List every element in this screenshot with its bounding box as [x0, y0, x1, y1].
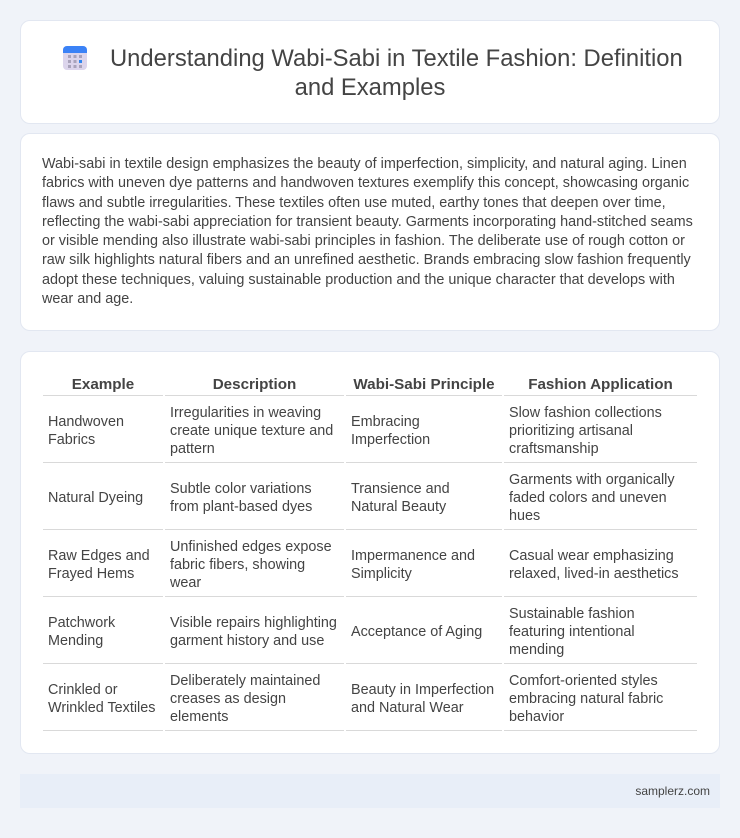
row: Patchwork Mending: garment history and use: [170, 633, 324, 649]
title: Understanding Wabi-Sabi in Textile Fashion: Definition: [110, 45, 683, 72]
row: Raw Edges and Frayed Hems: [48, 539, 679, 591]
row: Natural Dyeing: [48, 472, 675, 524]
row: Raw Edges and Frayed Hems: Frayed Hems: [48, 566, 134, 582]
row: Raw Edges and Frayed Hems: Simplicity: [351, 566, 412, 582]
row: Handwoven Fabrics: Handwoven: [48, 414, 124, 430]
row: Natural Dyeing: faded colors and uneven: [509, 490, 667, 506]
row: Natural Dyeing: Natural Beauty: [351, 499, 446, 515]
table header: Example: [72, 376, 134, 393]
row: Raw Edges and Frayed Hems: Impermanence and: [351, 548, 475, 564]
row: Crinkled or Wrinkled Textiles: Crinkled or: [48, 682, 118, 698]
row: Patchwork Mending: Sustainable fashion: [509, 606, 635, 622]
table header: Description: [213, 376, 296, 393]
paragraph text: Wabi-sabi in textile design emphasizes the beauty of imperfection, simplicity, and natural aging. Linen: [42, 156, 687, 172]
row: Handwoven Fabrics: Slow fashion collections: [509, 405, 662, 421]
row: Natural Dyeing: Subtle color variations: [170, 481, 312, 497]
row rules: [43, 395, 697, 731]
row: Crinkled or Wrinkled Textiles: [48, 673, 663, 725]
row: Handwoven Fabrics: Embracing: [351, 414, 420, 430]
title: and Examples: [295, 74, 445, 101]
row: Patchwork Mending: Patchwork: [48, 615, 115, 631]
row: Crinkled or Wrinkled Textiles: embracing natural fabric: [509, 691, 663, 707]
row: Natural Dyeing: from plant-based dyes: [170, 499, 312, 515]
paragraph text: adopt these techniques, valuing sustainable production and the unique character that develops with: [42, 272, 675, 288]
row: Raw Edges and Frayed Hems: Raw Edges and: [48, 548, 150, 564]
row: Handwoven Fabrics: Imperfection: [351, 432, 430, 448]
table header: Wabi-Sabi Principle: [353, 376, 495, 393]
row: Crinkled or Wrinkled Textiles: Comfort-oriented styles: [509, 673, 658, 689]
row: Raw Edges and Frayed Hems: Casual wear emphasizing: [509, 548, 674, 564]
row: Handwoven Fabrics: Fabrics: [48, 432, 95, 448]
row: Patchwork Mending: [48, 606, 635, 658]
paragraph text: fabrics with uneven dye patterns and handwoven textures exemplify this concept, showcasing organic: [42, 175, 689, 191]
header card: [20, 20, 720, 124]
row: Crinkled or Wrinkled Textiles: Wrinkled Textiles: [48, 700, 155, 716]
row: Handwoven Fabrics: [48, 405, 662, 457]
row: Patchwork Mending: Visible repairs highlighting: [170, 615, 337, 631]
paragraph text: reflecting the wabi-sabi appreciation for transient beauty. Garments incorporating hand-stitched seams: [42, 214, 693, 230]
row: Raw Edges and Frayed Hems: relaxed, lived-in aesthetics: [509, 566, 679, 582]
row: Crinkled or Wrinkled Textiles: elements: [170, 709, 228, 725]
row: Crinkled or Wrinkled Textiles: Deliberately maintained: [170, 673, 320, 689]
row: Raw Edges and Frayed Hems: fabric fibers, showing: [170, 557, 305, 573]
table header: [72, 376, 673, 393]
row: Patchwork Mending: mending: [509, 642, 564, 658]
row: Natural Dyeing: Natural Dyeing: [48, 490, 143, 506]
footer credit: samplerz.com: [635, 784, 710, 798]
title: [63, 45, 683, 101]
icon: calendar: [63, 46, 87, 70]
row: Patchwork Mending: Mending: [48, 633, 103, 649]
row: Natural Dyeing: Transience and: [351, 481, 450, 497]
row: Crinkled or Wrinkled Textiles: Beauty in Imperfection: [351, 682, 494, 698]
row: Crinkled or Wrinkled Textiles: and Natural Wear: [351, 700, 464, 716]
row: Raw Edges and Frayed Hems: wear: [170, 575, 201, 591]
row: Natural Dyeing: Garments with organically: [509, 472, 675, 488]
table card: [20, 351, 720, 754]
paragraph text: wear and age.: [42, 291, 133, 307]
row: Handwoven Fabrics: create unique texture and: [170, 423, 333, 439]
footer bar: [20, 774, 720, 808]
row: Natural Dyeing: hues: [509, 508, 540, 524]
table header: Fashion Application: [528, 376, 673, 393]
row: Crinkled or Wrinkled Textiles: creases as design: [170, 691, 286, 707]
row: Patchwork Mending: Acceptance of Aging: [351, 624, 482, 640]
row: Crinkled or Wrinkled Textiles: behavior: [509, 709, 564, 725]
row: Handwoven Fabrics: craftsmanship: [509, 441, 599, 457]
paragraph text: flaws and subtle irregularities. These textiles often use muted, earthy tones that deepen over time,: [42, 195, 666, 211]
paragraph text: [42, 156, 693, 307]
row: Patchwork Mending: featuring intentional: [509, 624, 635, 640]
row: Handwoven Fabrics: Irregularities in weaving: [170, 405, 321, 421]
row: Handwoven Fabrics: prioritizing artisanal: [509, 423, 633, 439]
paragraph text: raw silk highlights natural fibers and an unrefined aesthetic. Brands embracing slow fashion frequently: [42, 252, 691, 268]
row: Raw Edges and Frayed Hems: Unfinished edges expose: [170, 539, 332, 555]
row: Handwoven Fabrics: pattern: [170, 441, 215, 457]
paragraph text: or visible mending also illustrate wabi-sabi principles in fashion. The deliberate use of rough cotton or: [42, 233, 685, 249]
paragraph card: [20, 133, 720, 331]
